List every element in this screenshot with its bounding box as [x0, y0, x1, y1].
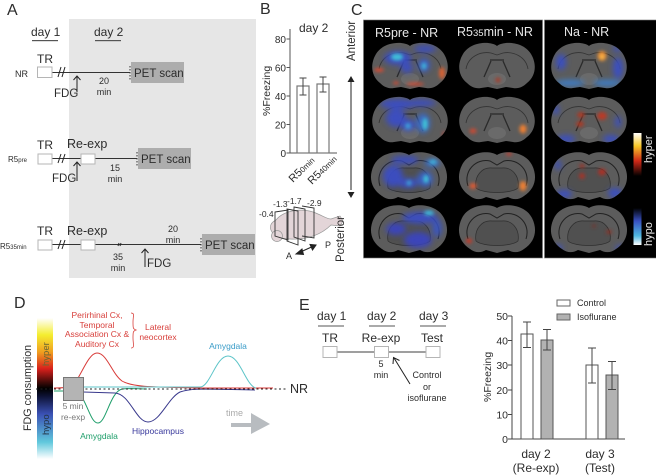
day 1 column: TR: [322, 331, 338, 345]
column title R5pre - NR: R5pre - NR: [375, 26, 438, 40]
NR timeline: min: [97, 87, 111, 97]
bar chart: freezing day 2 and day 3: 10: [496, 410, 508, 422]
bar chart: freezing day 2 and day 3: day 3: [585, 447, 615, 461]
day 2 chart title: day 2: [299, 21, 329, 35]
bar chart: freezing day 2 and day 3: (Re-exp): [513, 461, 559, 475]
timeline: min: [374, 370, 388, 380]
bar chart: freezing day 2 and day 3: %Freezing: [482, 352, 494, 402]
NR timeline: FDG: [54, 88, 78, 100]
legend: Isoflurane: [577, 312, 617, 322]
day 2 column: [362, 309, 401, 345]
R5 35min timeline: TR: [37, 224, 53, 238]
cyan curve: amygdala: [83, 356, 256, 388]
bar chart: freezing day 2 and day 3: 30: [496, 360, 508, 372]
icon: mouse brain with slice planes: A: [286, 251, 292, 261]
R5pre timeline: R5pre: [8, 155, 28, 164]
arrow: control or isoflurane: or: [423, 382, 431, 392]
timeline: [323, 346, 440, 380]
R5pre timeline: min: [108, 174, 122, 184]
gray re-exposure box: [64, 378, 84, 400]
timeline: 5: [378, 359, 384, 369]
red region labels: Perirhinal Cx,: [71, 310, 123, 320]
panel letter B: B: [260, 1, 271, 18]
time arrow: time: [226, 408, 243, 418]
day 2 heading: day 2: [94, 25, 124, 39]
day 1 heading: day 1: [31, 25, 61, 39]
day 3 column: Test: [421, 331, 444, 345]
color bar: [37, 318, 53, 459]
icon: mouse brain with slice planes: [259, 196, 343, 261]
R5 35min timeline: Re-exp: [67, 224, 107, 238]
NR label: NR: [290, 382, 308, 396]
panel: E isoflurane experiment: [299, 297, 625, 475]
bar chart: freezing day 2 and day 3: [482, 311, 625, 475]
R5pre timeline: Re-exp: [67, 137, 107, 151]
bar chart: freezing day 2: 80: [275, 35, 286, 46]
panel letter C: C: [351, 2, 363, 19]
bar chart: freezing day 2 and day 3: 20: [496, 385, 508, 397]
day 3 column: day 3: [419, 309, 449, 323]
black imaging panel right: [544, 20, 656, 258]
legend: [557, 298, 617, 322]
day 3 column: [419, 309, 449, 345]
hippocampus label: Hippocampus: [132, 426, 184, 436]
panel letter A: A: [7, 2, 18, 19]
bar chart: freezing day 2 and day 3: 40: [496, 336, 508, 348]
color scale: hypo: hypo: [643, 222, 655, 246]
re-exp label: [61, 401, 85, 422]
amygdala label bottom: Amygdala: [80, 431, 118, 441]
time arrow: [226, 408, 270, 434]
red curve: lateral neocortex: [54, 353, 273, 388]
red region labels: [65, 310, 129, 349]
bar chart: freezing day 2 and day 3: (Test): [585, 461, 615, 475]
NR timeline: [15, 52, 184, 100]
brain column 3: [551, 43, 627, 253]
day 2 column: day 2: [367, 309, 397, 323]
red region labels: Association Cx &: [65, 329, 129, 339]
arrow: control or isoflurane: [393, 358, 447, 403]
R5 35min timeline: [0, 224, 255, 273]
NR timeline: TR: [37, 52, 53, 66]
R5pre timeline: FDG: [52, 173, 76, 185]
panel: B freezing bar chart and brain sketch: [259, 1, 343, 261]
legend: Control: [577, 298, 606, 308]
black imaging panel left: [364, 20, 542, 258]
re-exp label: re-exp: [61, 412, 85, 422]
icon: mouse brain with slice planes: P: [325, 240, 331, 250]
color bar label hypo: hypo: [41, 414, 52, 435]
red region labels: Auditory Cx: [75, 339, 120, 349]
y axis title: FDG consumption: [22, 345, 34, 431]
R5 35min timeline: 35: [113, 252, 123, 262]
day 1 column: day 1: [317, 309, 347, 323]
bar chart: freezing day 2: 60: [275, 64, 286, 74]
bar chart: freezing day 2: 40: [275, 92, 286, 103]
color bar label hyper: hyper: [41, 342, 52, 366]
blue curve: hippocampus: [83, 389, 255, 422]
bar chart: freezing day 2: [261, 29, 339, 187]
color scale: hyper: [634, 133, 655, 176]
color scale: hypo: [634, 208, 655, 246]
arrow: control or isoflurane: isoflurane: [407, 393, 447, 403]
R5 35min timeline: FDG: [147, 258, 171, 270]
NR timeline: 20: [99, 76, 109, 86]
green curve: amygdala: [54, 389, 147, 423]
bar chart: freezing day 2: 20: [275, 120, 286, 132]
day 2 column: Re-exp: [362, 331, 401, 345]
arrow: control or isoflurane: Control: [412, 370, 442, 380]
bar chart: freezing day 2: 0: [280, 149, 286, 160]
panel letter E: E: [299, 297, 310, 314]
axis: anterior to posterior: [335, 21, 358, 262]
brace: [131, 313, 136, 348]
red region labels: Temporal: [80, 320, 115, 330]
NR baseline: [36, 388, 288, 390]
NR timeline: NR: [15, 69, 28, 79]
R5pre timeline: PET scan: [141, 154, 191, 166]
icon: mouse brain with slice planes: -2.9: [307, 198, 322, 208]
NR timeline: PET scan: [134, 68, 184, 80]
brain column 1: [371, 43, 448, 253]
panel: A experimental timelines: [0, 2, 256, 278]
panel: C brain imaging maps: [335, 2, 656, 262]
panel letter D: D: [14, 295, 26, 312]
axis: anterior to posterior: Anterior: [346, 21, 358, 61]
day 1 column: [317, 309, 347, 345]
axis: anterior to posterior: Posterior: [335, 216, 347, 262]
re-exp label: 5 min: [63, 401, 84, 411]
panel: D FDG consumption model: [14, 295, 308, 459]
R5 35min timeline: PET scan: [205, 240, 255, 252]
lateral neocortex label: Lateral: [145, 322, 171, 332]
R5 35min timeline: 20: [168, 224, 178, 234]
amygdala label top: Amygdala: [209, 341, 247, 351]
icon: mouse brain with slice planes: -0.4: [259, 209, 274, 219]
bar chart: freezing day 2 and day 3: day 2: [521, 447, 551, 461]
lateral neocortex label: [139, 322, 177, 342]
column title Na - NR: Na - NR: [564, 25, 609, 39]
color scale: hyper: hyper: [643, 135, 655, 163]
bar chart: freezing day 2: R50min: [287, 154, 317, 185]
R5 35min timeline: min: [166, 235, 180, 245]
icon: mouse brain with slice planes: -1.7: [287, 196, 302, 206]
lateral neocortex label: neocortex: [139, 332, 177, 342]
brain column 2: [459, 43, 535, 253]
bar chart: freezing day 2: %Freezing: [261, 66, 273, 116]
R5pre timeline: [8, 137, 191, 185]
R5pre timeline: 15: [110, 163, 120, 173]
R5 35min timeline: min: [111, 263, 125, 273]
R5pre timeline: TR: [37, 138, 53, 152]
bar chart: freezing day 2: R540min: [306, 153, 339, 187]
R5 35min timeline: R535min: [0, 242, 27, 251]
icon: mouse brain with slice planes: -1.3: [273, 199, 288, 209]
bar chart: freezing day 2 and day 3: 50: [496, 311, 508, 323]
column title R5 35min - NR: R535min - NR: [457, 25, 533, 39]
bar chart: freezing day 2 and day 3: 0: [502, 434, 508, 446]
gray day 2 background: [69, 19, 256, 278]
